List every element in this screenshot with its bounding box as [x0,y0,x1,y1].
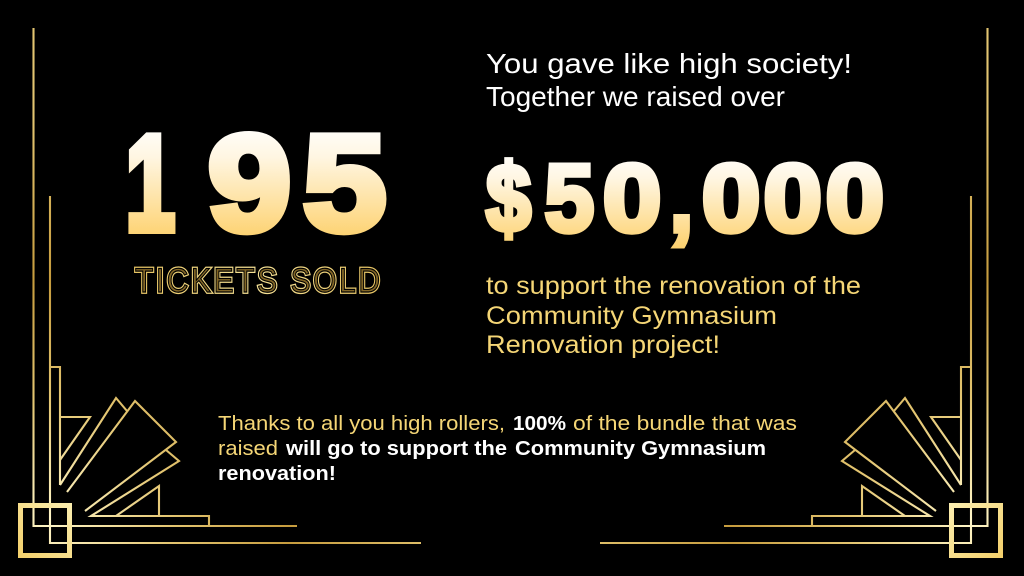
intro text [486,48,852,112]
big amount: $50,000: 0 [826,145,884,252]
label: tickets sold: TICKETS SOLD [135,261,380,299]
thank you note: of the bundle that was [573,413,797,435]
big amount: $50,000: 5 [545,144,594,252]
thank you note: Thanks to all you high rollers, [218,413,505,435]
art deco corner: right [600,28,1000,556]
big number: 195: 1 [125,108,175,260]
big amount: $50,000: 0 [763,145,822,252]
purpose text: Community Gymnasium [486,302,777,330]
big number: 195: 5 [303,108,386,259]
big number: 195 [125,108,386,260]
big amount: $50,000: 0 [603,145,662,252]
purpose text: to support the renovation of the [486,272,861,300]
big amount: $50,000: , [670,146,693,252]
label: tickets sold: TICKETS SOLD [135,261,380,299]
thank you note: renovation! [218,463,336,485]
thank you note: 100% [513,413,566,435]
intro text: Together we raised over [486,81,785,112]
purpose text: Renovation project! [486,331,720,359]
big amount: $50,000: 0 [702,145,761,252]
art deco corner: left [20,28,421,556]
big number: 195: 9 [208,108,291,259]
thank you note [218,413,797,485]
thank you note: Community Gymnasium [515,438,766,460]
big amount: $50,000 [486,144,884,252]
thank you note: raised [218,438,278,460]
thank you note: will go to support the [285,438,507,460]
intro text: You gave like high society! [486,48,852,79]
big amount: $50,000: $ [486,145,531,252]
purpose text [486,272,861,359]
